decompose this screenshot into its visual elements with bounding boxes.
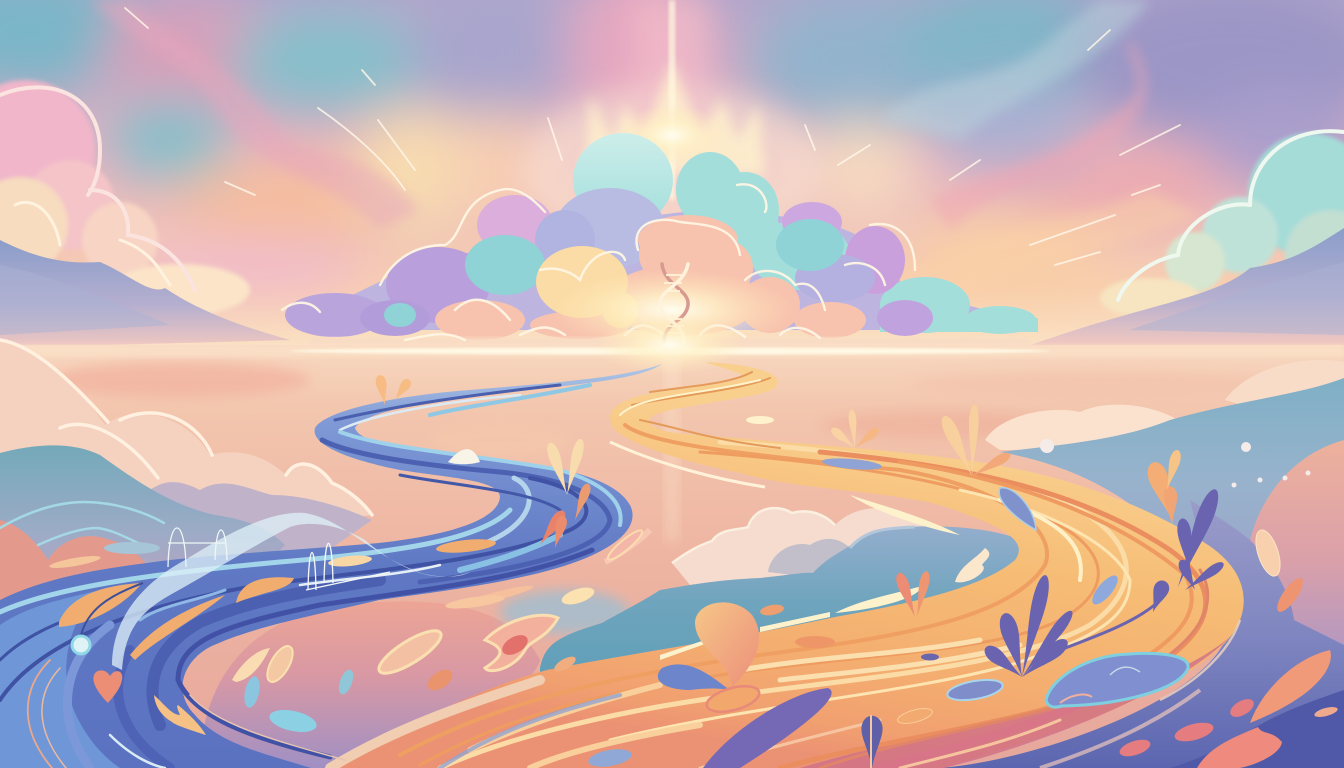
waveform: pulse bells left: [168, 528, 227, 567]
golden river: dark purple streak: [703, 688, 832, 768]
blue river: lighter left bank: [0, 590, 120, 768]
mountains left: [0, 240, 290, 348]
grey-blue ground patch: [500, 590, 630, 634]
purple plant center: [981, 574, 1076, 683]
cloud: lavender and magenta layers: [285, 188, 933, 337]
golden river: rose lower band: [800, 635, 1232, 768]
lower left teal hill: [0, 445, 285, 590]
waveform: cable and ring node: [80, 583, 143, 640]
large orange leaf plant: [658, 602, 762, 717]
waveform: blue-grey splash: [104, 542, 160, 554]
left ground clouds: [0, 340, 372, 560]
scattered sky strokes: [125, 8, 1180, 265]
orange plants on gold river: [829, 404, 1183, 619]
left sky cloud: [0, 80, 250, 316]
large lens pond: [1046, 653, 1188, 707]
horizon glow: [0, 315, 1344, 540]
cloud: teal accents: [384, 219, 844, 327]
cloud: yellow front: [536, 246, 638, 328]
blue river: [0, 364, 662, 768]
middle teal hill between rivers: [540, 526, 1026, 680]
mountains right: [1030, 228, 1344, 345]
cloud: scalloped white outlines: [282, 184, 915, 340]
bottom right dark band: [1170, 690, 1344, 768]
waveform: pulse bells right: [306, 543, 390, 590]
sky: painted swirls: [90, 0, 1200, 300]
orange plant: small sprout: [829, 409, 881, 451]
ground: [0, 345, 1344, 768]
sky background: [0, 0, 1344, 360]
cloud: peach and pink front: [435, 215, 866, 340]
bottom right orange leaves: [1118, 650, 1339, 768]
river petals and ripples: [93, 416, 1307, 768]
right pink hill: [1250, 440, 1344, 645]
DNA helix: [660, 264, 688, 342]
middle clouds: [672, 508, 950, 585]
central luminous cloud mass: [282, 133, 1038, 350]
ground peach haze bands: [50, 362, 1290, 456]
golden river: flow lines: [330, 372, 1208, 768]
right sky cloud: [1100, 131, 1344, 318]
sun burst and central beam: [522, 0, 822, 255]
purple plant right: [1060, 487, 1226, 650]
right teal hills: [1000, 378, 1344, 640]
waveform: notes left: [0, 502, 164, 547]
golden river: [328, 362, 1244, 768]
lower left lavender cloud: [150, 482, 372, 570]
blue river: orange streaks: [49, 530, 650, 660]
lower pink ground patch: [200, 601, 540, 768]
blue river: flow lines: [0, 385, 621, 768]
lower left rosy hills: [0, 520, 150, 640]
bottom centre small plant: [861, 715, 883, 768]
cloud: glowing base: [552, 270, 792, 350]
scattered dots right: [1040, 439, 1310, 488]
cloud: teal crown: [573, 133, 1038, 334]
orange plant: red sprout: [894, 570, 931, 619]
orange plant: sprout near center: [938, 404, 1013, 480]
right ground clouds: [985, 360, 1344, 450]
waveform ribbon: [0, 502, 470, 670]
cloud: filler mass: [300, 184, 1036, 330]
bottom right lavender ground: [940, 500, 1344, 768]
plants on blue river: [375, 374, 593, 549]
golden river: teal-side foam stripes: [610, 442, 989, 660]
